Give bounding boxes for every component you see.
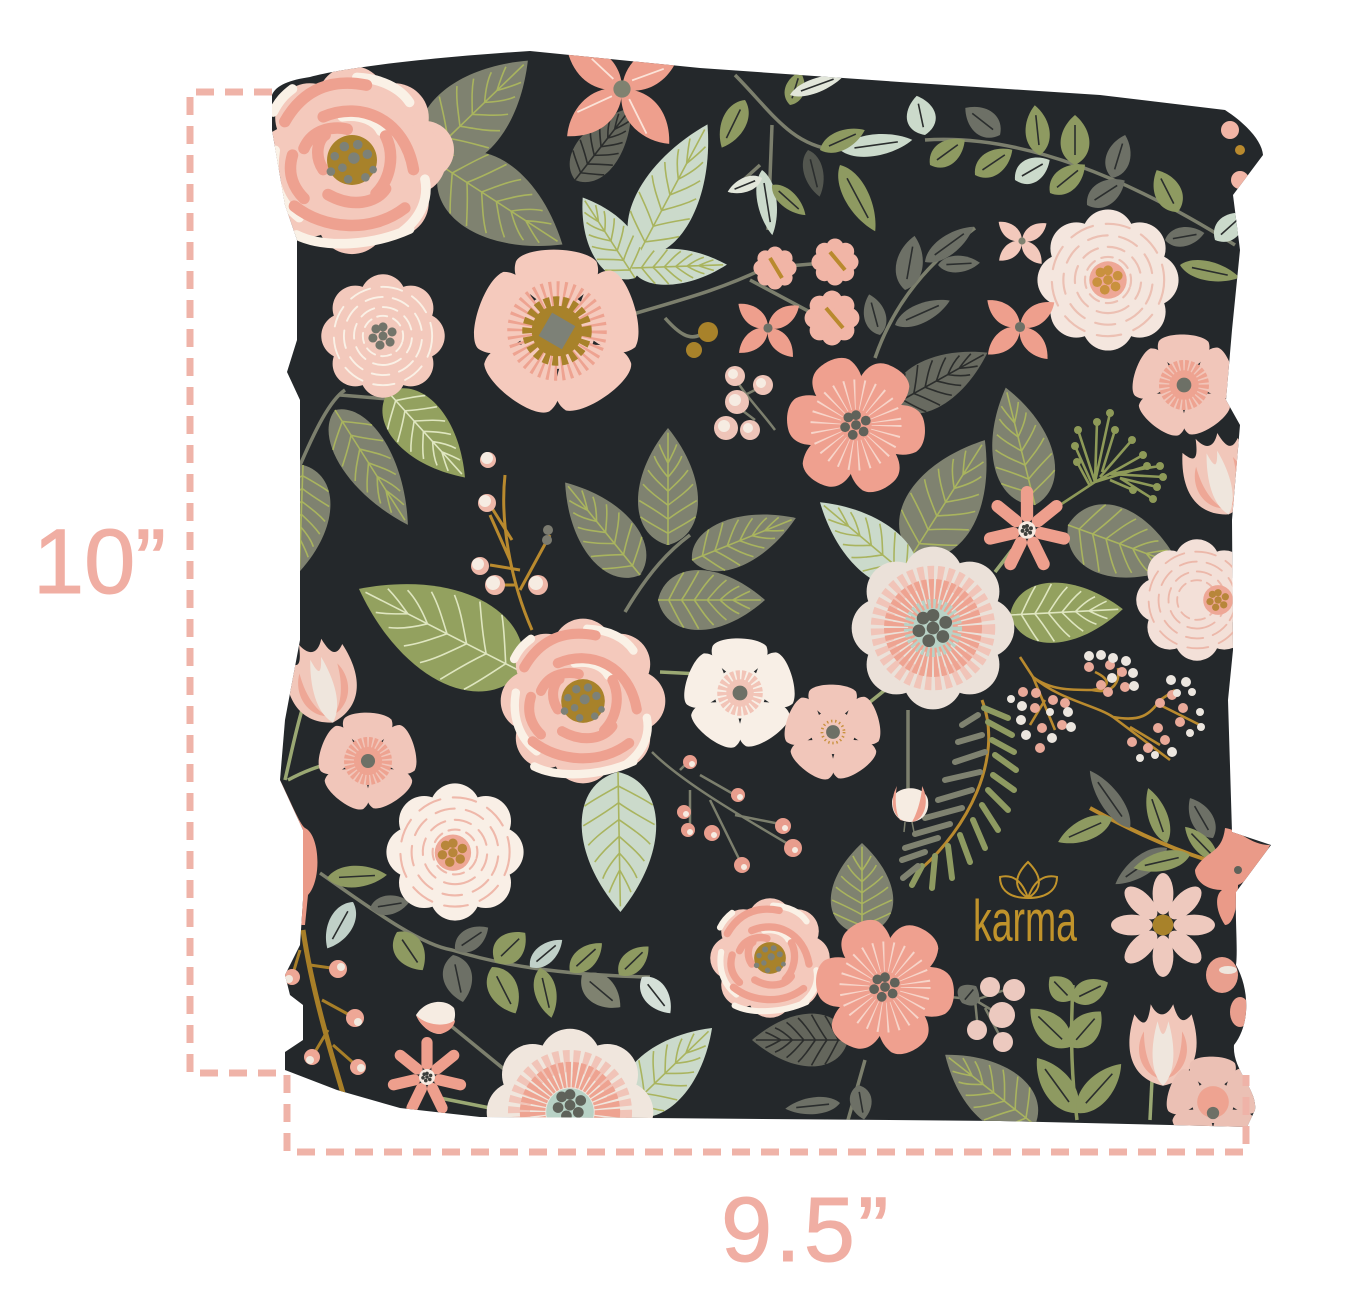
- flower: salmon small centre top: [733, 296, 804, 363]
- mid branch leaves: [864, 226, 980, 335]
- pink and white seed clusters: [1007, 650, 1205, 762]
- flower: pale small top right: [994, 216, 1051, 269]
- flower: daisy lower right: [1111, 873, 1215, 977]
- flower: cream ruffled lower left: [386, 783, 524, 921]
- flower: slim salmon bottom: [387, 1037, 467, 1115]
- flower: lower rose: [710, 898, 830, 1018]
- flower: centre rose: [501, 619, 665, 783]
- left edge salmon flower: [280, 780, 317, 925]
- bottom sprigs: [784, 969, 1131, 1122]
- buds: [416, 786, 928, 1034]
- flower: ruffled right edge: [1136, 539, 1233, 661]
- flower: small white centre: [684, 638, 795, 748]
- flower: large pink five petal: [474, 250, 638, 413]
- fern: [902, 700, 1016, 888]
- pink buds: [753, 238, 859, 345]
- dashed width bracket: [287, 1075, 1246, 1152]
- right edge salmon flower: [1195, 828, 1270, 925]
- pink berry cluster top: [714, 366, 775, 440]
- stems and twigs: [285, 75, 1235, 1120]
- edge berries right: [1206, 121, 1250, 1027]
- flower: small pink centre: [784, 684, 880, 780]
- flower: white ruffled top right: [1037, 209, 1179, 351]
- small cluster bottom: [950, 977, 1025, 1052]
- red berry branch: [652, 752, 802, 873]
- karma logo: karma: [973, 889, 1077, 954]
- leaves right: [605, 332, 1192, 1148]
- flower: bottom right corner: [1163, 1057, 1263, 1152]
- icon: lotus: [1000, 862, 1057, 898]
- flower: white ruffled upper left: [321, 274, 445, 398]
- karma logo: [973, 862, 1077, 954]
- gold twig lower left: [284, 930, 366, 1100]
- leaves upper left: [270, 34, 734, 573]
- tulips: [278, 427, 1261, 1086]
- flower: large white with pink centre: [852, 547, 1014, 709]
- flower: small pink left: [318, 712, 416, 810]
- top right branch leaves: [903, 93, 1253, 287]
- flower: salmon star upper: [787, 358, 925, 492]
- height label: 10”: [33, 511, 166, 613]
- flower: salmon star lower: [816, 920, 954, 1054]
- green seed twig: [1060, 409, 1167, 505]
- width label: 9.5”: [721, 1179, 892, 1281]
- top centre branch leaves: [711, 68, 914, 237]
- gold berries: [686, 322, 718, 358]
- gold bud sprig: [471, 452, 553, 630]
- lower left branch leaves: [317, 864, 680, 1021]
- flower: slim salmon: [983, 486, 1071, 572]
- flower: four petal top: [567, 54, 674, 144]
- flower: small pink right: [1132, 334, 1230, 436]
- neck gaiter fabric panel: [272, 51, 1271, 1127]
- flower: bottom large white: [486, 1028, 654, 1118]
- dashed height bracket: [190, 92, 285, 1073]
- flower: top left rose: [258, 66, 454, 254]
- flower: salmon small top right: [981, 292, 1060, 366]
- lower right branch: [1058, 770, 1216, 884]
- leaves centre: [338, 428, 805, 913]
